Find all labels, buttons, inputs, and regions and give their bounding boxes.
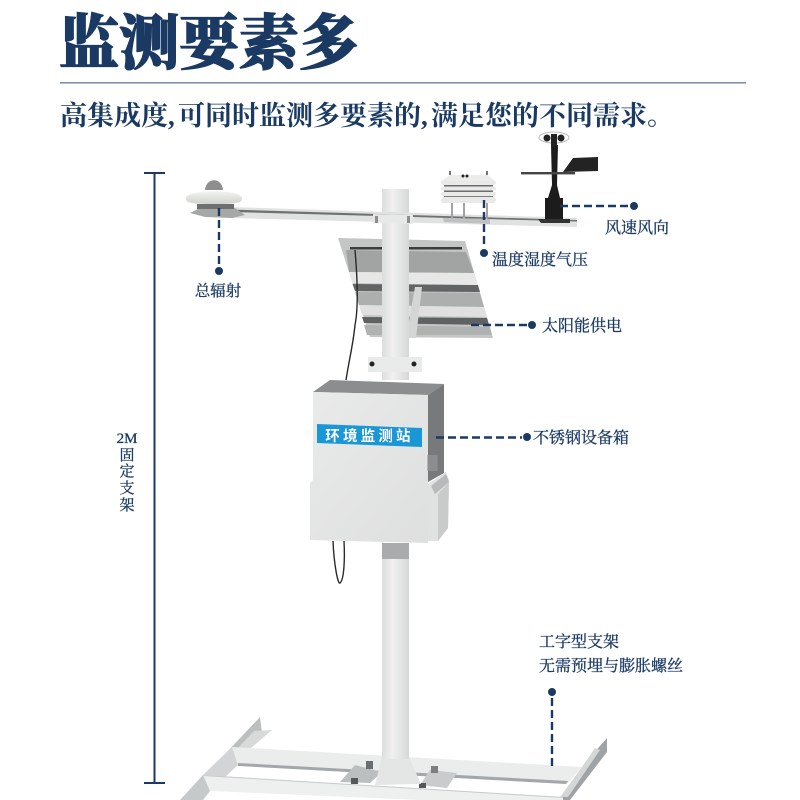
- crossarm: [230, 207, 577, 227]
- height label: [117, 431, 137, 514]
- solar panel: [338, 238, 493, 338]
- upper pole: [368, 189, 422, 380]
- height label: 固: [119, 447, 135, 464]
- label: stainless steel box: 不锈钢设备箱: [533, 429, 629, 447]
- leader: temperature humidity pressure: [480, 200, 488, 257]
- header divider: [60, 82, 746, 84]
- total radiation sensor: [186, 180, 245, 218]
- height label: 架: [119, 496, 135, 514]
- lower pole: [382, 543, 409, 759]
- leader: solar power: [471, 321, 536, 329]
- cable: [333, 250, 357, 583]
- leader: total radiation: [215, 208, 223, 275]
- subtitle: 满足您的不同需求。: [431, 101, 674, 131]
- mounting plates: [340, 765, 382, 783]
- stainless steel equipment box: [310, 380, 449, 543]
- label: base bracket: [539, 633, 683, 675]
- base frame: [180, 717, 607, 800]
- subtitle: 高集成度,: [60, 100, 175, 131]
- label: solar power: 太阳能供电: [542, 317, 622, 335]
- front cross beam: [203, 775, 563, 800]
- height scale bar: [144, 172, 165, 784]
- label: base bracket: 工字型支架: [539, 633, 619, 651]
- box nameplate: 环境监测站: [325, 427, 414, 445]
- left angle rail: [225, 717, 262, 754]
- height label: 2M: [117, 431, 137, 447]
- leader: stainless steel box: [436, 433, 531, 441]
- bolts: [366, 761, 373, 769]
- label: base bracket: 无需预埋与膨胀螺丝: [539, 657, 683, 675]
- leader: wind speed and direction: [560, 202, 638, 210]
- label: wind speed and direction: 风速风向: [605, 219, 669, 237]
- height label: 定: [119, 463, 135, 480]
- rear cross beam: [232, 747, 582, 783]
- box nameplate: [317, 424, 422, 447]
- label: temperature humidity pressure: 温度湿度气压: [492, 251, 588, 269]
- height label: 支: [119, 480, 135, 497]
- title: 监测要素多: [59, 11, 359, 77]
- leader: base bracket: [548, 688, 556, 769]
- label: total radiation: 总辐射: [195, 282, 242, 300]
- right angle rail: [560, 738, 607, 800]
- pole flange: [375, 757, 421, 785]
- wind speed and direction sensor: [521, 132, 598, 223]
- subtitle: 可同时监测多要素的,: [178, 101, 428, 131]
- temperature humidity pressure shield: [440, 171, 496, 224]
